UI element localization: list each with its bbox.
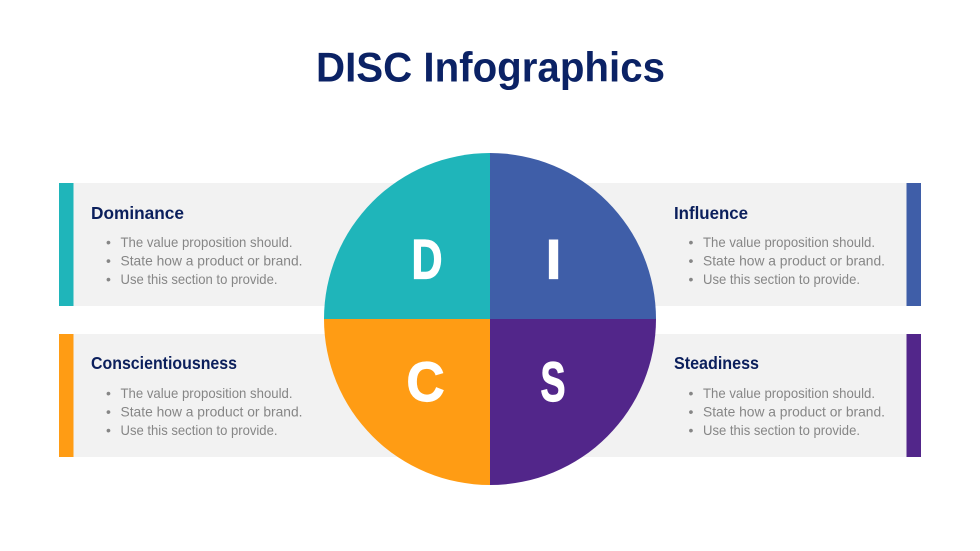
quadrant C: C bbox=[406, 350, 444, 413]
text block: Conscientiousness bullets bbox=[106, 385, 302, 438]
text block: Steadiness bullets: • bbox=[688, 385, 694, 401]
text block: Conscientiousness bullets: Use this section to provide. bbox=[120, 422, 278, 438]
quadrant C bbox=[324, 319, 490, 485]
heading: Dominance: Dominance bbox=[91, 203, 184, 223]
text block: Dominance bullets: • bbox=[106, 234, 111, 250]
title: DISC Infographics bbox=[316, 44, 665, 90]
text block: Conscientiousness bullets: • bbox=[106, 404, 111, 420]
text block: Influence bullets bbox=[688, 234, 885, 287]
text block: Steadiness bullets bbox=[688, 385, 885, 438]
DISC circle chart bbox=[324, 153, 656, 485]
heading: Conscientiousness: Conscientiousness bbox=[91, 353, 237, 373]
panel: Conscientiousness bbox=[59, 334, 403, 457]
quadrant S bbox=[490, 319, 656, 485]
quadrant S: S bbox=[540, 350, 566, 413]
text block: Influence bullets: Use this section to provide. bbox=[703, 271, 860, 287]
text block: Conscientiousness bullets: • bbox=[106, 422, 111, 438]
text block: Conscientiousness bullets: The value proposition should. bbox=[120, 385, 292, 401]
heading: Steadiness: Steadiness bbox=[674, 353, 759, 373]
text block: Dominance bullets: • bbox=[106, 252, 111, 268]
text block: Influence bullets: • bbox=[688, 234, 694, 250]
quadrant D: D bbox=[412, 228, 442, 290]
text block: Influence bullets: State how a product or brand. bbox=[703, 252, 885, 268]
text block: Steadiness bullets: • bbox=[688, 422, 694, 438]
panel: Influence bbox=[577, 183, 921, 306]
text block: Dominance bullets bbox=[106, 234, 302, 287]
text block: Conscientiousness bullets: • bbox=[106, 385, 111, 401]
text block: Dominance bullets: The value proposition should. bbox=[120, 234, 292, 250]
text block: Steadiness bullets: • bbox=[688, 404, 694, 420]
text block: Steadiness bullets: The value proposition should. bbox=[703, 385, 875, 401]
text block: Steadiness bullets: Use this section to provide. bbox=[703, 422, 860, 438]
text block: Dominance bullets: Use this section to provide. bbox=[120, 271, 278, 287]
quadrant I bbox=[490, 153, 656, 319]
quadrant D bbox=[324, 153, 490, 319]
panel: Dominance bbox=[59, 183, 403, 306]
text block: Influence bullets: The value proposition should. bbox=[703, 234, 875, 250]
heading: Influence: Influence bbox=[674, 203, 748, 223]
quadrant I: I bbox=[546, 228, 561, 290]
text block: Conscientiousness bullets: State how a product or brand. bbox=[120, 404, 302, 420]
text block: Influence bullets: • bbox=[688, 252, 694, 268]
panel: Steadiness bbox=[577, 334, 921, 457]
text block: Influence bullets: • bbox=[688, 271, 694, 287]
text block: Dominance bullets: • bbox=[106, 271, 111, 287]
text block: Dominance bullets: State how a product or brand. bbox=[120, 252, 302, 268]
text block: Steadiness bullets: State how a product or brand. bbox=[703, 404, 885, 420]
